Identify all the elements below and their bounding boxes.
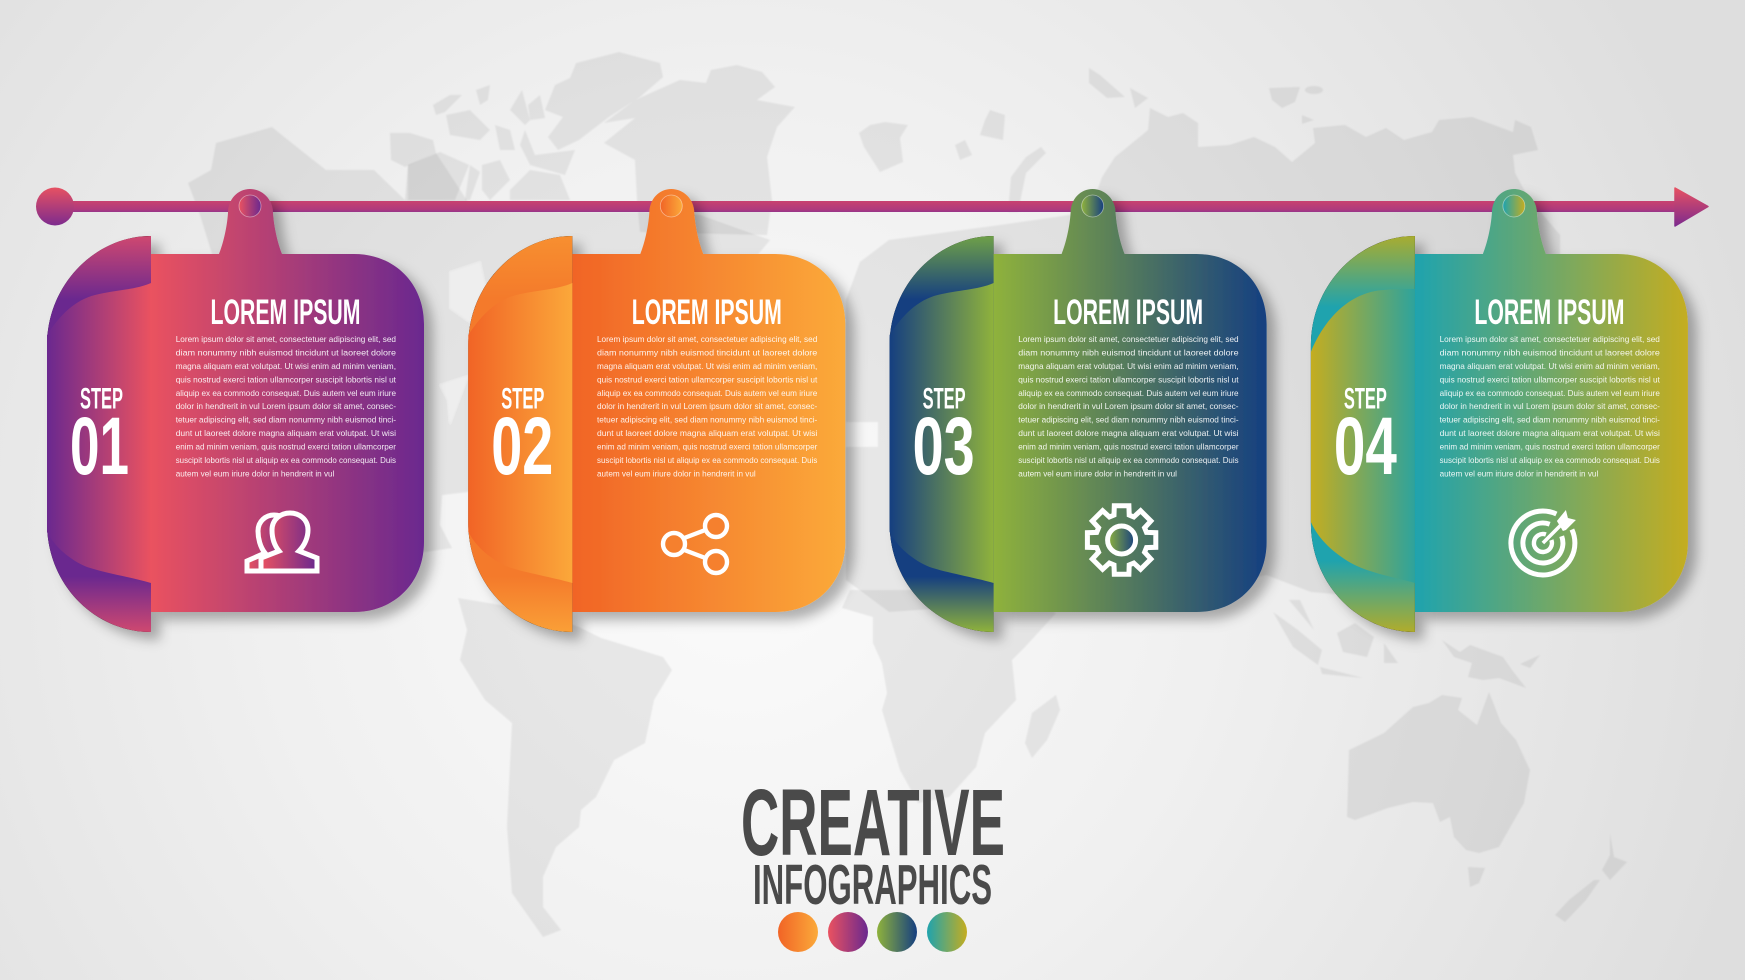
body text 01: aliquip ex ea commodo consequat. Duis autem vel eum iriure xyxy=(176,388,396,398)
icon: people xyxy=(247,513,317,571)
card body 01 xyxy=(151,189,424,612)
heading 02: LOREM IPSUM xyxy=(632,293,782,332)
body text 03: quis nostrud exerci tation ullamcorper suscipit lobortis nisl ut xyxy=(1018,374,1239,384)
icon: share xyxy=(663,515,727,573)
body text 02: diam nonummy nibh euismod tincidunt ut laoreet dolore xyxy=(597,347,818,357)
step number 03: 03 xyxy=(913,401,975,492)
body text 03: Lorem ipsum dolor sit amet, consectetuer adipiscing elit, sed xyxy=(1018,334,1239,344)
body text 02: suscipit lobortis nisl ut aliquip ex ea commodo consequat. Duis xyxy=(597,455,817,465)
body text 03: dolor in hendrerit in vul Lorem ipsum dolor sit amet, consec- xyxy=(1018,401,1239,411)
heading 03: LOREM IPSUM xyxy=(1053,293,1203,332)
title xyxy=(741,770,1005,917)
body text 03: tetuer adipiscing elit, sed diam nonummy nibh euismod tinci- xyxy=(1018,415,1239,425)
body text 02: aliquip ex ea commodo consequat. Duis autem vel eum iriure xyxy=(597,388,817,398)
body text 04: dolor in hendrerit in vul Lorem ipsum dolor sit amet, consec- xyxy=(1440,401,1660,411)
icon: target xyxy=(1511,510,1576,575)
body text 02: magna aliquam erat volutpat. Ut wisi enim ad minim veniam, xyxy=(597,361,817,371)
eyelet 01 xyxy=(239,195,261,217)
body text 01: tetuer adipiscing elit, sed diam nonummy nibh euismod tinci- xyxy=(176,415,396,425)
body text 04 xyxy=(1440,334,1660,478)
body text 03: magna aliquam erat volutpat. Ut wisi enim ad minim veniam, xyxy=(1018,361,1239,371)
panel: step 02 xyxy=(468,189,845,632)
body text 04: suscipit lobortis nisl ut aliquip ex ea commodo consequat. Duis xyxy=(1440,455,1660,465)
eyelet 03 xyxy=(1082,195,1104,217)
timeline arrow xyxy=(36,188,1708,226)
timeline start dot xyxy=(36,188,74,226)
body text 01: magna aliquam erat volutpat. Ut wisi enim ad minim veniam, xyxy=(176,361,396,371)
step label 03: STEP xyxy=(923,382,966,416)
eyelet 02 xyxy=(660,195,682,217)
body text 02: quis nostrud exerci tation ullamcorper suscipit lobortis nisl ut xyxy=(597,374,818,384)
card body 04 xyxy=(1415,189,1688,612)
body text 04: autem vel eum iriure dolor in hendrerit in vul xyxy=(1440,468,1598,478)
body text 01: Lorem ipsum dolor sit amet, consectetuer adipiscing elit, sed xyxy=(176,334,396,344)
body text 01: autem vel eum iriure dolor in hendrerit in vul xyxy=(176,468,334,478)
body text 03: enim ad minim veniam, quis nostrud exerci tation ullamcorper xyxy=(1018,442,1239,452)
body text 04: magna aliquam erat volutpat. Ut wisi enim ad minim veniam, xyxy=(1440,361,1660,371)
side fold 02 xyxy=(468,236,572,632)
fold inner panel 02 xyxy=(468,283,572,583)
body text 04: aliquip ex ea commodo consequat. Duis autem vel eum iriure xyxy=(1440,388,1660,398)
step number 04: 04 xyxy=(1334,401,1397,492)
side fold 04 xyxy=(1311,236,1415,632)
body text 01: diam nonummy nibh euismod tincidunt ut laoreet dolore xyxy=(176,347,396,357)
body text 03 xyxy=(1018,334,1239,478)
step label 04: STEP xyxy=(1344,382,1387,416)
step number 02: 02 xyxy=(491,401,553,492)
heading 04: LOREM IPSUM xyxy=(1474,293,1624,332)
body text 03: autem vel eum iriure dolor in hendrerit in vul xyxy=(1018,468,1177,478)
body text 01: quis nostrud exerci tation ullamcorper suscipit lobortis nisl ut xyxy=(176,374,397,384)
body text 01 xyxy=(176,334,397,478)
title line: creative: CREATIVE xyxy=(741,770,1005,876)
heading 01: LOREM IPSUM xyxy=(210,293,360,332)
panel: step 01 xyxy=(47,189,424,632)
fold inner panel 01 xyxy=(47,283,151,583)
body text 01: enim ad minim veniam, quis nostrud exerci tation ullamcorper xyxy=(176,442,396,452)
world map xyxy=(188,52,1627,937)
step number 01: 01 xyxy=(70,401,129,492)
side fold 03 xyxy=(890,236,994,632)
body text 02: enim ad minim veniam, quis nostrud exerci tation ullamcorper xyxy=(597,442,817,452)
body text 04: dunt ut laoreet dolore magna aliquam erat volutpat. Ut wisi xyxy=(1440,428,1660,438)
body text 02: tetuer adipiscing elit, sed diam nonummy nibh euismod tinci- xyxy=(597,415,817,425)
body text 04: Lorem ipsum dolor sit amet, consectetuer adipiscing elit, sed xyxy=(1440,334,1660,344)
body text 01: dolor in hendrerit in vul Lorem ipsum dolor sit amet, consec- xyxy=(176,401,396,411)
fold inner panel 03 xyxy=(890,283,994,583)
body text 02: dolor in hendrerit in vul Lorem ipsum dolor sit amet, consec- xyxy=(597,401,817,411)
body text 02: autem vel eum iriure dolor in hendrerit in vul xyxy=(597,468,756,478)
body text 02 xyxy=(597,334,818,478)
body text 03: diam nonummy nibh euismod tincidunt ut laoreet dolore xyxy=(1018,347,1239,357)
body text 02: Lorem ipsum dolor sit amet, consectetuer adipiscing elit, sed xyxy=(597,334,818,344)
body text 03: suscipit lobortis nisl ut aliquip ex ea commodo consequat. Duis xyxy=(1018,455,1239,465)
timeline arrowhead xyxy=(1675,188,1708,226)
body text 03: aliquip ex ea commodo consequat. Duis autem vel eum iriure xyxy=(1018,388,1239,398)
body text 01: suscipit lobortis nisl ut aliquip ex ea commodo consequat. Duis xyxy=(176,455,396,465)
body text 04: enim ad minim veniam, quis nostrud exerci tation ullamcorper xyxy=(1440,442,1660,452)
side fold 01 xyxy=(47,236,151,632)
card body 03 xyxy=(994,189,1267,612)
body text 01: dunt ut laoreet dolore magna aliquam erat volutpat. Ut wisi xyxy=(176,428,396,438)
step label 01: STEP xyxy=(80,382,123,416)
fold inner panel 04 xyxy=(1311,289,1415,583)
eyelet 04 xyxy=(1503,195,1525,217)
title line: infographics: INFOGRAPHICS xyxy=(753,853,992,917)
card body 02 xyxy=(572,189,845,612)
panel: step 04 xyxy=(1311,189,1688,632)
body text 04: quis nostrud exerci tation ullamcorper suscipit lobortis nisl ut xyxy=(1440,374,1660,384)
step label 02: STEP xyxy=(501,382,544,416)
colour dots xyxy=(778,912,967,952)
body text 04: diam nonummy nibh euismod tincidunt ut laoreet dolore xyxy=(1440,347,1660,357)
body text 02: dunt ut laoreet dolore magna aliquam erat volutpat. Ut wisi xyxy=(597,428,817,438)
body text 04: tetuer adipiscing elit, sed diam nonummy nibh euismod tinci- xyxy=(1440,415,1660,425)
panel: step 03 xyxy=(890,189,1267,632)
icon: gear xyxy=(1087,506,1156,574)
body text 03: dunt ut laoreet dolore magna aliquam erat volutpat. Ut wisi xyxy=(1018,428,1239,438)
